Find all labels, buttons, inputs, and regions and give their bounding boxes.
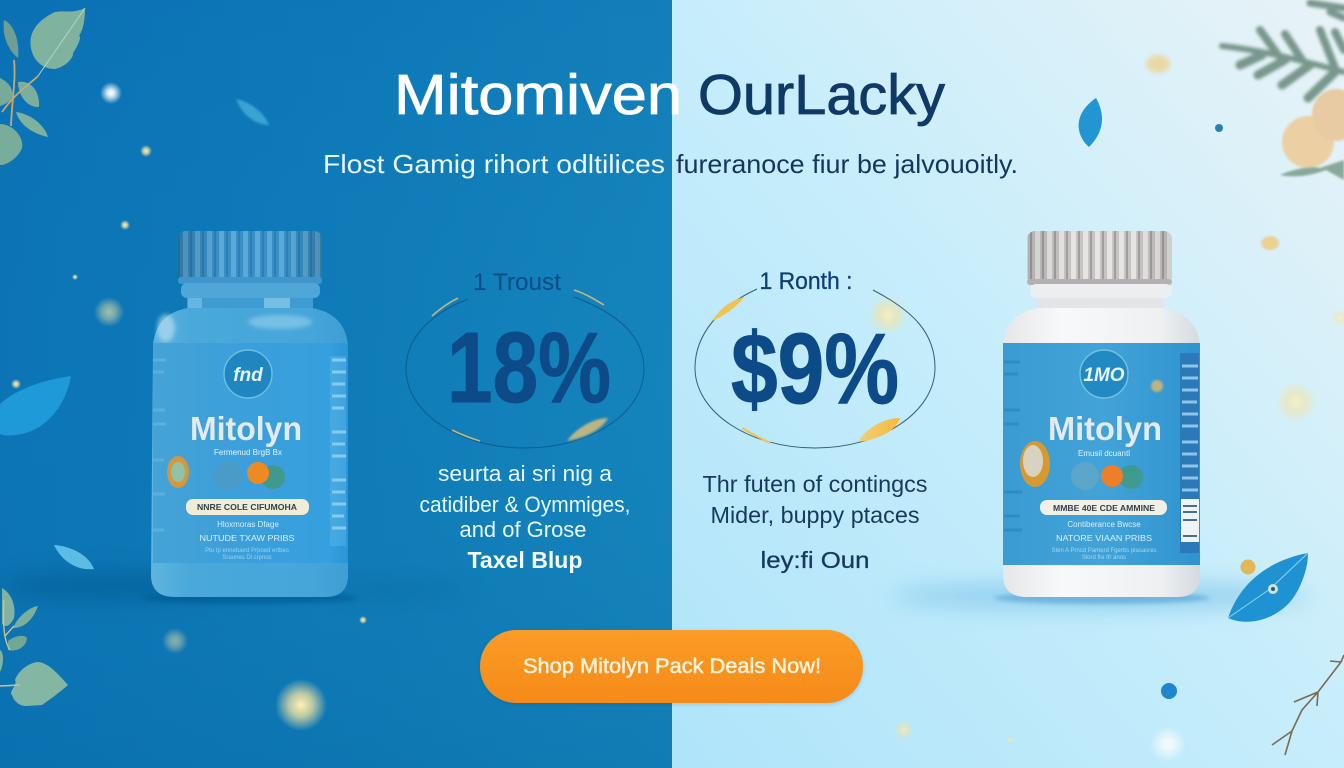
bottle badges: Fermenud BrgB Bx <box>214 448 282 457</box>
stat: left ring <box>406 269 644 448</box>
bottle brand name: Mitolyn <box>190 410 302 447</box>
bottle strip and fine print: Ptu tp ennetuerd Prpoed ertbes <box>205 548 289 554</box>
stat label: 1 Troust <box>473 269 561 296</box>
bottle logo: fnd <box>233 365 263 386</box>
icon: blue drop leaf upper right <box>1079 98 1102 147</box>
stat value: $9% <box>731 313 899 425</box>
text block: right description: Mider, buppy ptaces <box>710 502 920 528</box>
bottle badges <box>1020 380 1163 490</box>
bottle strip and fine print: Contiberance Bwcse <box>1067 520 1141 529</box>
bottle strip and fine print <box>1040 500 1167 561</box>
icon: blue leaf with gold bead lower right <box>1228 553 1308 622</box>
icon: floating leaves left <box>0 99 269 569</box>
ring gold accents <box>432 290 608 441</box>
title: Mitomiven <box>394 63 682 127</box>
button: call to action <box>480 630 863 704</box>
button: call to action: Shop Mitolyn Pack Deals Now! <box>523 655 821 678</box>
stat value: 18% <box>447 312 611 424</box>
bottle badges <box>167 448 285 490</box>
bottle label <box>1003 343 1200 565</box>
text block: left description <box>420 461 630 573</box>
decoration: floating particles left <box>11 82 367 731</box>
bottle logo: 1MO <box>1083 365 1125 386</box>
bottle body <box>1003 284 1200 597</box>
bottle strip and fine print: Sten A Prncd Pamerd Fgerbs plasasres <box>1051 548 1157 554</box>
bottle strip and fine print: NATORE VIAAN PRIBS <box>1056 534 1152 543</box>
bottle cap <box>1027 231 1172 285</box>
panel: left blue background <box>0 0 672 768</box>
icon: pine branch with berries top right <box>1222 3 1344 180</box>
ring gold accents <box>712 297 900 443</box>
bottle logo <box>1080 350 1128 398</box>
bottle strip and fine print: Hloxmoras Dfage <box>217 520 279 529</box>
title: OurLacky <box>698 63 946 127</box>
bottle strip and fine print: NUTUDE TXAW PRIBS <box>200 534 294 543</box>
stat label: 1 Ronth : <box>760 268 852 295</box>
bottle body <box>151 283 348 597</box>
decoration: floating particles right <box>868 55 1344 762</box>
bottle: left blue <box>142 231 358 604</box>
text block: right description: ley:fi Oun <box>760 547 870 573</box>
bottle strip and fine print: MMBE 40E CDE AMMINE <box>1053 503 1155 513</box>
icon: leaf sprig bottom left <box>0 588 68 706</box>
text block: right description: Thr futen of contingcs <box>702 471 928 497</box>
title <box>394 63 946 127</box>
icon: bare twig bottom right <box>1272 655 1344 755</box>
text block: left description: catidiber & Oymmiges, <box>420 492 630 517</box>
text block: left description: seurta ai sri nig a <box>438 461 613 486</box>
ring outline <box>406 297 644 448</box>
text block: left description: and of Grose <box>460 517 586 542</box>
bottle strip and fine print: Slord fre Ifr anos <box>1082 555 1126 561</box>
panel: right light background <box>672 0 1344 768</box>
subtitle: Flost Gamig rihort odltilices <box>323 149 665 179</box>
text block: right description <box>702 471 928 573</box>
text block: left description: Taxel Blup <box>468 547 582 573</box>
bottle: right white <box>994 231 1210 604</box>
bottle logo <box>224 350 272 398</box>
bottle strip and fine print: NNRE COLE CIFUMOHA <box>197 502 297 512</box>
subtitle <box>323 149 1018 179</box>
bottle strip and fine print <box>186 499 309 561</box>
ring outline <box>695 289 935 448</box>
bottle badges: Emusil dcuantl <box>1078 449 1130 458</box>
bottle strip and fine print: Sraunes Dl crpnos <box>222 555 272 561</box>
bottle label <box>153 343 348 563</box>
icon: leaf sprig top left <box>0 8 85 165</box>
bottle brand name: Mitolyn <box>1048 410 1162 447</box>
bottle cap <box>178 231 322 284</box>
stat: right ring <box>695 268 935 448</box>
subtitle: fureranoce fiur be jalvouoitly. <box>676 149 1018 179</box>
